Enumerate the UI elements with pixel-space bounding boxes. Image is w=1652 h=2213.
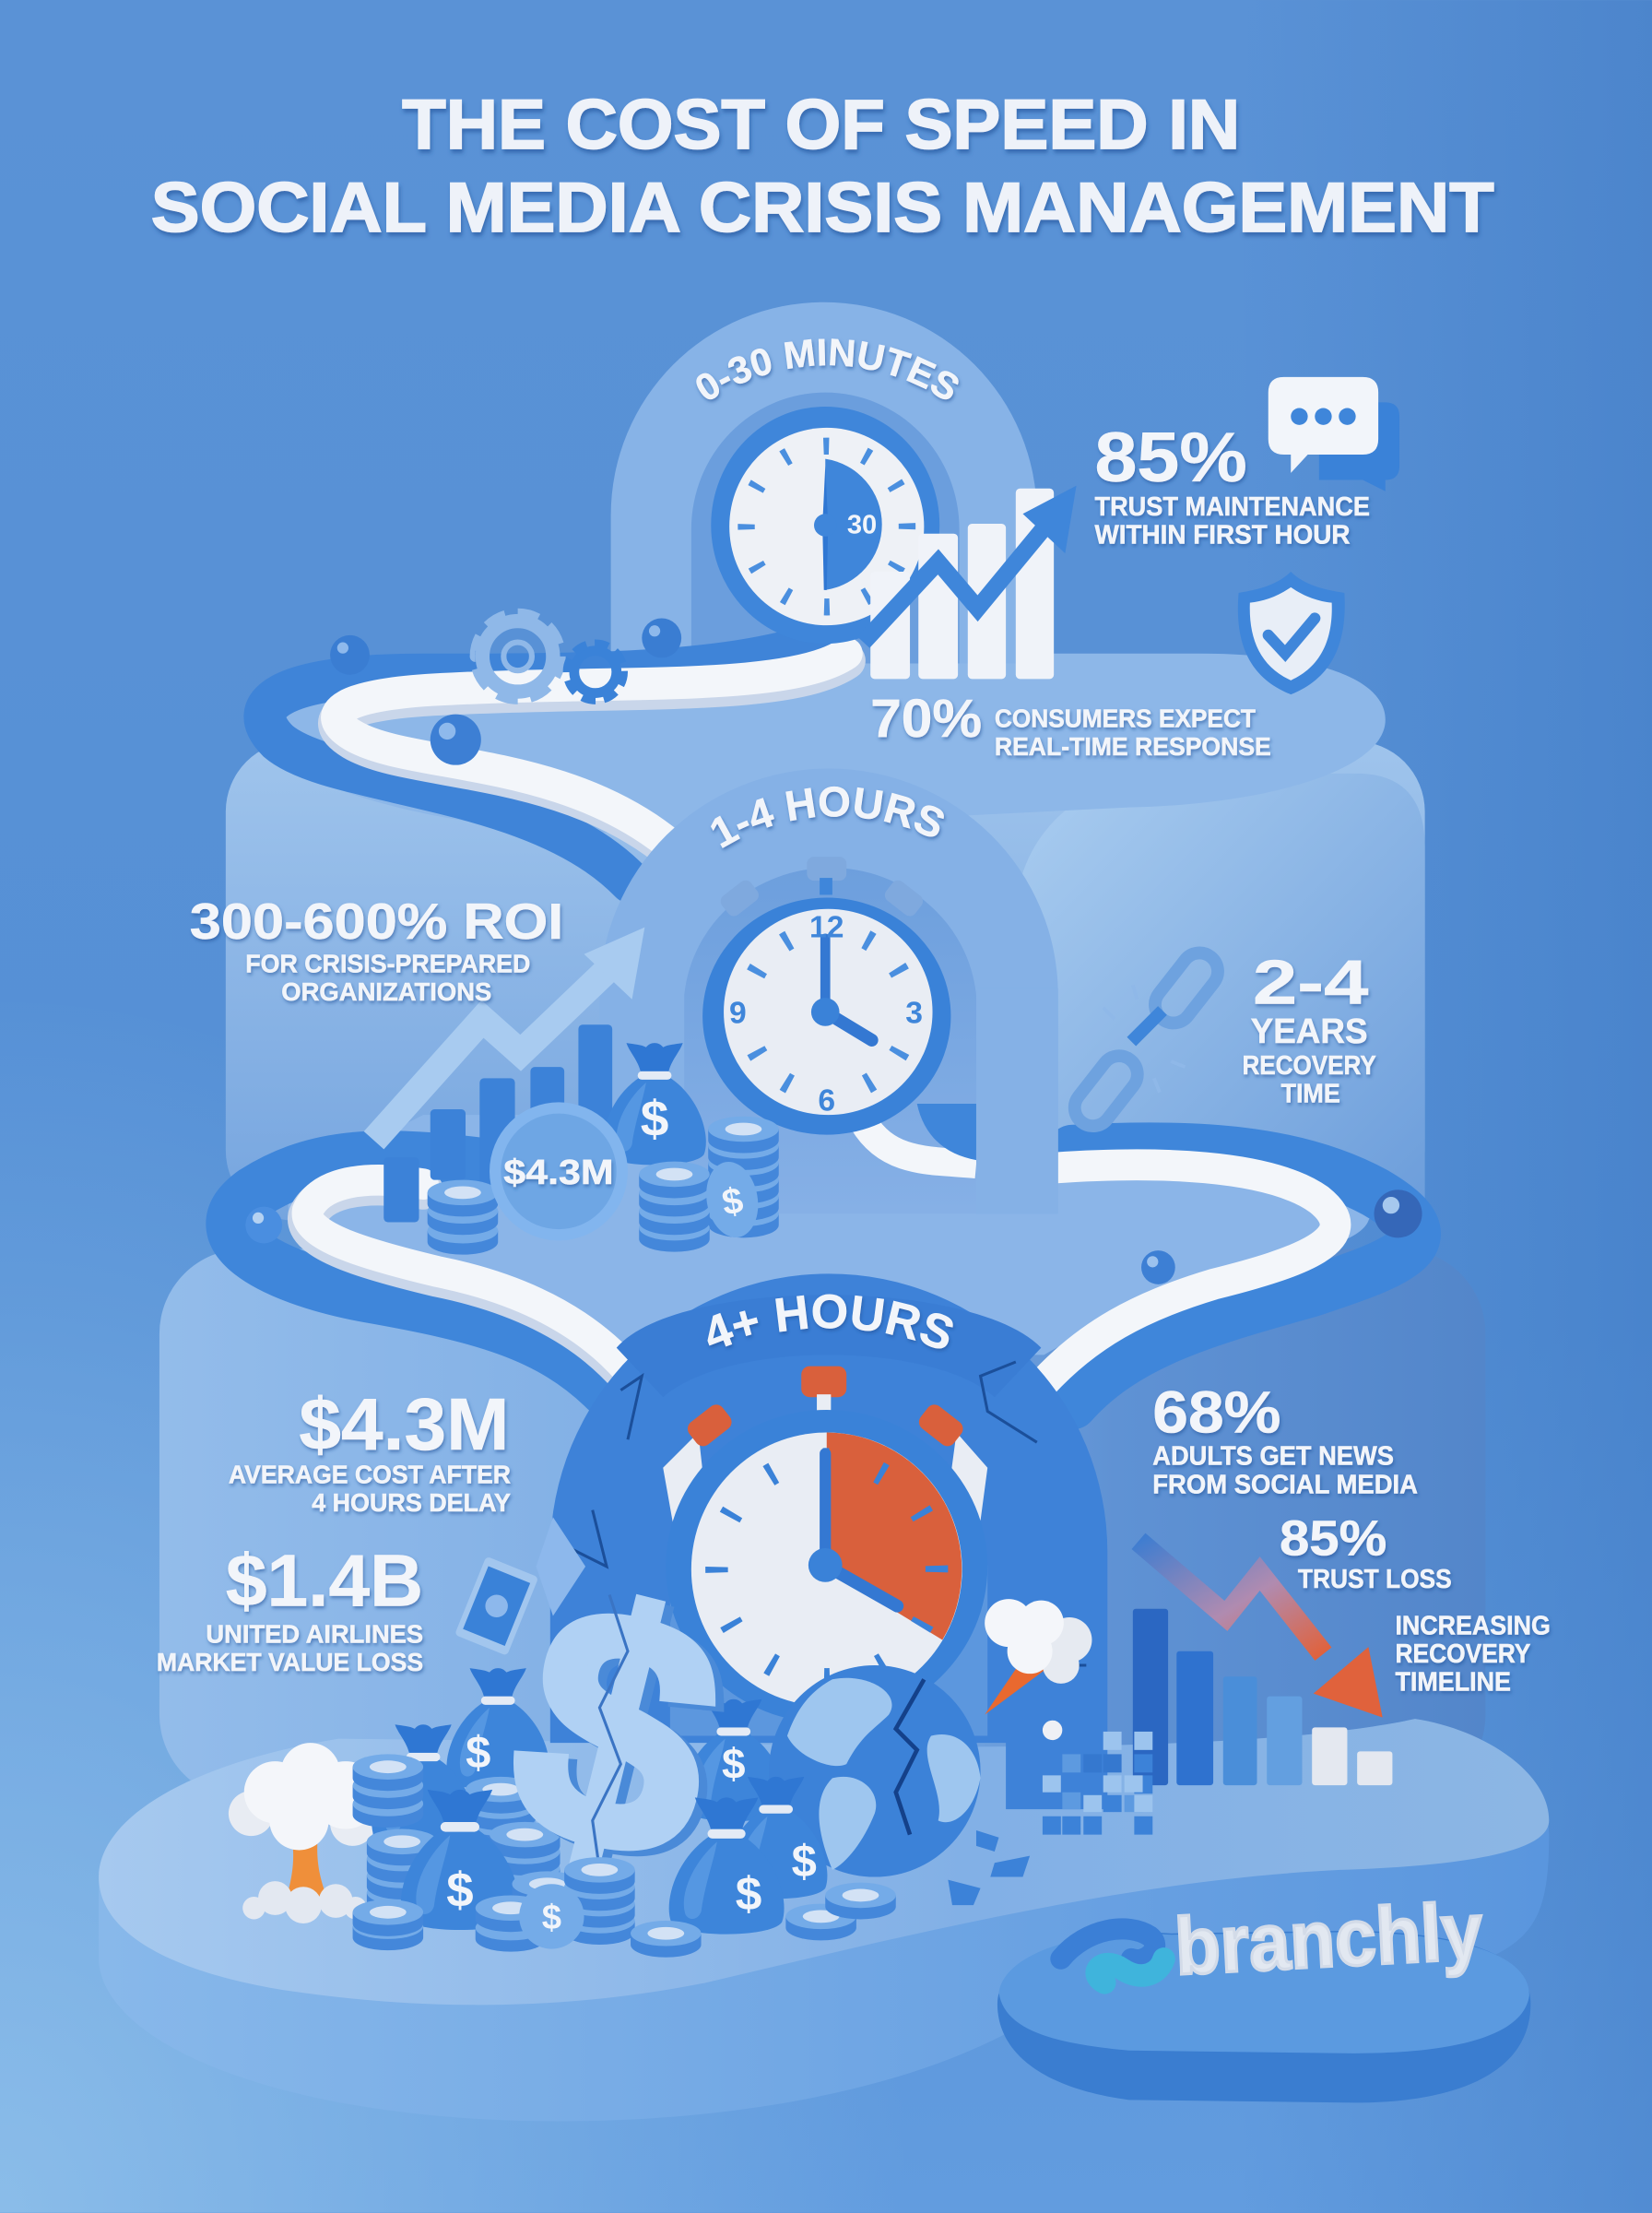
icon: money bag and coins: $ [641, 1090, 668, 1147]
panel: tier one wall [226, 741, 1425, 1221]
icon: money bag and coins [428, 1043, 779, 1255]
icon: cracked dollar: $ [482, 1530, 751, 1934]
money bags and coins pile: $ [381, 1784, 404, 1832]
stat: $1.4B market loss: MARKET VALUE LOSS [157, 1648, 423, 1676]
icon: falling banknote [454, 1556, 538, 1656]
panel: tier one disc [247, 654, 1386, 833]
arch: 1-4 hours [599, 768, 1058, 1213]
stat: 68% adults: FROM SOCIAL MEDIA [1152, 1470, 1418, 1499]
front money bags and coins: $ [542, 1898, 561, 1937]
stat: increasing recovery timeline [1395, 1611, 1551, 1698]
stat: 85% trust loss: TRUST LOSS [1298, 1565, 1452, 1594]
stat: 68% adults: ADULTS GET NEWS [1152, 1442, 1394, 1472]
clock: 30 minutes [711, 407, 939, 644]
clock: red zone stopwatch [666, 1367, 987, 1723]
front money bags and coins: $ [736, 1866, 761, 1920]
stat: 85% trust maintenance: TRUST MAINTENANCE [1095, 492, 1370, 522]
spheres on middle tier [245, 1189, 1422, 1284]
title: THE COST OF SPEED IN [402, 86, 1240, 164]
pixel blocks [1043, 1732, 1152, 1835]
arch label: 0-30 minutes: 0-30 MINUTES [695, 338, 962, 404]
stat: $4.3M average cost: 4 HOURS DELAY [312, 1488, 511, 1517]
ribbon: top tier path [265, 638, 846, 882]
chart: falling bars and broken arrow [1133, 1541, 1392, 1785]
stat: 70% consumers: CONSUMERS EXPECT [995, 704, 1256, 732]
arch label: 4+ hours: 4+ HOURS [708, 1295, 955, 1352]
stat: increasing recovery timeline: INCREASING [1395, 1611, 1551, 1640]
chart: rising arrow with bars [374, 928, 644, 1222]
money bags and coins pile [353, 1668, 785, 1950]
ribbon: middle tier left [232, 1157, 628, 1391]
stat: $1.4B market loss: $1.4B [226, 1540, 423, 1622]
panel: base platform side [99, 1719, 1549, 2121]
stat: $1.4B market loss: UNITED AIRLINES [206, 1620, 423, 1649]
clock: 4 hours alarm: 9 [729, 997, 747, 1031]
stat: 70% consumers: 70% [870, 689, 982, 749]
logo: branchly [1061, 1887, 1485, 1992]
stat: 2-4 years: RECOVERY [1242, 1051, 1376, 1081]
icon: gears [476, 614, 623, 700]
icon: mushroom explosion [229, 1743, 380, 1923]
stat: 2-4 years: TIME [1281, 1079, 1340, 1108]
clock: 4 hours alarm: 12 [809, 910, 844, 944]
money bags and coins pile: $ [466, 1729, 490, 1779]
panel: base platform top [99, 1719, 1549, 2005]
stat: 68% adults [1152, 1379, 1418, 1499]
stat: 85% trust maintenance: 85% [1095, 419, 1247, 497]
arch label: 1-4 hours: 1-4 HOURS [711, 786, 947, 852]
title: SOCIAL MEDIA CRISIS MANAGEMENT [151, 169, 1494, 247]
chart: rising bars [864, 486, 1077, 679]
panel: tier two floor [289, 1115, 1370, 1355]
stat: 68% adults: 68% [1152, 1379, 1281, 1446]
money bags and coins pile: $ [446, 1864, 474, 1918]
stat: 70% consumers [870, 689, 1271, 761]
clock: 4 hours alarm [702, 857, 950, 1135]
stat: $4.3M average cost: AVERAGE COST AFTER [229, 1461, 511, 1489]
stat: increasing recovery timeline: TIMELINE [1395, 1668, 1511, 1698]
stat: 85% trust maintenance [1095, 419, 1370, 550]
clock: 30 minutes: 30 [847, 511, 877, 540]
stat: 85% trust maintenance: WITHIN FIRST HOUR [1095, 520, 1351, 550]
icon: shield check [1238, 572, 1345, 694]
money bags and coins pile: $ [722, 1739, 746, 1787]
front money bags and coins [476, 1777, 896, 1958]
stat: increasing recovery timeline: RECOVERY [1395, 1639, 1530, 1669]
clock: 4 hours alarm: 6 [818, 1084, 835, 1118]
stat: 70% consumers: REAL-TIME RESPONSE [995, 732, 1271, 761]
stat: 2-4 years [1242, 948, 1376, 1108]
stat: 300-600% ROI: 300-600% ROI [190, 893, 563, 950]
front money bags and coins: $ [792, 1838, 817, 1888]
icon: broken chain [1068, 945, 1225, 1133]
logo: branchly: branchly [1173, 1887, 1485, 1992]
stat: $1.4B market loss [157, 1540, 423, 1676]
icons: path spheres top [330, 619, 681, 765]
icon: speech bubbles [1268, 377, 1399, 491]
panel: tier two wall [159, 1249, 1485, 1799]
arch: 0-30 minutes [611, 302, 1037, 663]
stat: 85% trust loss: 85% [1280, 1512, 1386, 1567]
stat: 2-4 years: YEARS [1251, 1012, 1368, 1051]
icon: impact explosion [985, 1599, 1092, 1740]
panel: logo platform [997, 1931, 1530, 2102]
clock: 4 hours alarm: 3 [905, 997, 923, 1031]
stat: $4.3M average cost: $4.3M [299, 1383, 509, 1465]
ribbon: middle tier right [1037, 1148, 1415, 1404]
icon: money bag and coins: $ [719, 1180, 746, 1224]
debris fragments [948, 1830, 1030, 1905]
stat: 2-4 years: 2-4 [1253, 948, 1369, 1017]
stat: 300-600% ROI: FOR CRISIS-PREPARED [245, 950, 530, 978]
title [151, 86, 1494, 247]
arch: 4+ hours cracked [537, 1273, 1107, 1809]
icon: cracked dollar: $ [491, 1535, 760, 1939]
icon: money bag and coins: $4.3M [503, 1153, 614, 1192]
stat: $4.3M average cost [229, 1383, 511, 1517]
icon: cracked globe [769, 1665, 981, 1877]
stat: 300-600% ROI [190, 893, 563, 1006]
stat: 300-600% ROI: ORGANIZATIONS [281, 977, 491, 1006]
stat: 85% trust loss [1280, 1512, 1452, 1594]
